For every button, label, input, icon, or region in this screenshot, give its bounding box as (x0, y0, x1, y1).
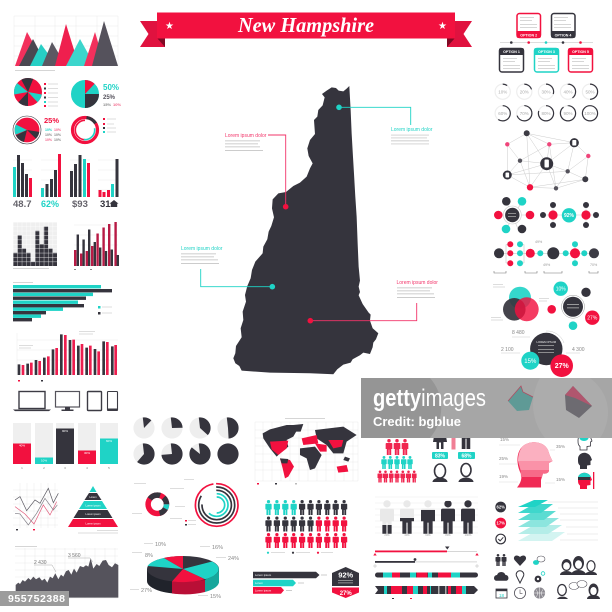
getty watermark band (361, 378, 612, 438)
arrow labels: Lorem (255, 581, 264, 585)
pyramid chart (68, 486, 118, 534)
pie 37 (189, 417, 211, 439)
callout: southeast red: Lorem ipsum dolor (396, 280, 438, 286)
area chart: 3 560 (68, 553, 81, 559)
3D pie chart (130, 542, 239, 600)
3D pie chart: 10% (155, 542, 166, 548)
layered stack chart (518, 500, 598, 541)
pie chart 1 (21, 85, 35, 99)
head segmented chart (499, 437, 565, 488)
people avatars (557, 556, 600, 599)
pie 62 (133, 443, 155, 465)
grouped bar chart (17, 331, 118, 382)
hexagon stat: 27% (340, 591, 352, 597)
stacked progress columns: 3 (64, 466, 66, 470)
progress rings: 20% (520, 89, 529, 94)
bubble flow row (494, 240, 599, 273)
pie stats 3: 25% (44, 116, 59, 125)
donut segments (132, 483, 185, 519)
icon set: 18 (499, 593, 504, 598)
option boxes (499, 14, 593, 72)
large bubble stats (501, 330, 585, 377)
people grid (265, 500, 347, 554)
3D pie chart: 27% (141, 588, 152, 594)
3D pie chart: 15% (210, 594, 221, 600)
line chart (13, 483, 58, 530)
bar chart group 48.7: 48.7 (13, 199, 32, 210)
rings legend (184, 479, 196, 526)
pyramid chart: Lorem ipsum (86, 512, 100, 516)
world map (255, 418, 358, 484)
bubble group: 27% (587, 316, 598, 322)
head segmented chart: 15% (500, 437, 509, 442)
progress rings: 90% (563, 111, 573, 116)
gender comparison: 68% (461, 454, 472, 460)
pie legend 1 (44, 83, 58, 107)
pie stats 2 (103, 83, 121, 107)
bar chart group $93 (70, 155, 90, 210)
callout: west red (225, 133, 289, 210)
person bar chart (375, 497, 478, 537)
large bubble stats: 4 300 (572, 347, 585, 353)
slider bars (373, 546, 479, 567)
quarter pies (133, 417, 155, 439)
pie chart 3 (13, 116, 41, 144)
3D pie chart: 24% (228, 556, 239, 562)
horizontal bar chart (13, 282, 112, 321)
callout: southwest teal: Lorem ipsum dolor (181, 246, 223, 252)
watermark id strip (0, 591, 69, 606)
progress rings: 80% (541, 111, 551, 116)
segmented pill bar (375, 572, 478, 578)
head segmented chart: 35% (556, 444, 565, 449)
pie 25 (161, 417, 183, 439)
bubble cluster 2 (540, 202, 599, 228)
stacked progress columns: 30% (84, 451, 90, 455)
option boxes: OPTION 1 (503, 50, 520, 54)
getty watermark band: Credit: bgblue (373, 415, 461, 429)
option boxes: OPTION 3 (538, 50, 555, 54)
pie 50 (217, 417, 239, 439)
arrow labels (253, 572, 327, 594)
person bar chart: 40% (404, 533, 410, 537)
pyramid chart: Lorem ipsum (86, 522, 100, 526)
head segmented chart: 25% (499, 456, 508, 461)
paired bar chart (74, 222, 119, 270)
hexagon stat (332, 567, 359, 598)
icon set (494, 554, 545, 599)
donut chart (72, 118, 98, 142)
pie stats 3: 10% (45, 128, 53, 132)
stacked progress columns: 4 (86, 466, 88, 470)
hexagon stat: 92% (338, 570, 354, 580)
pyramid chart: Lorem ipsum (86, 504, 100, 508)
title banner: New Hampshire (237, 13, 374, 37)
callout: north teal: Lorem ipsum dolor (391, 127, 433, 133)
person bar chart: 80% (445, 533, 451, 537)
pie stats 3: 10% (45, 138, 53, 142)
stacked progress columns (13, 423, 118, 470)
progress rings: 60% (498, 111, 507, 116)
stacked progress columns: 1 (21, 466, 23, 470)
large bubble stats: 15% (524, 359, 537, 365)
large bubble stats: 2 100 (501, 347, 514, 353)
callout: southwest teal (181, 246, 275, 290)
progress rings (495, 84, 598, 121)
venn diagram (491, 284, 549, 321)
stacked progress columns: 2 (43, 466, 45, 470)
concentric rings (195, 484, 238, 526)
stacked progress columns: 40% (19, 444, 25, 448)
area chart: 2 430 (34, 560, 47, 566)
pie stats 3: 10% (54, 133, 62, 137)
progress rings: 30% (541, 89, 551, 94)
pie stats 2: 10% (113, 102, 121, 107)
head segmented chart: 15% (556, 477, 565, 482)
gender comparison: 83% (435, 454, 446, 460)
pie stats 2: 15% (103, 102, 111, 107)
pie stats 3 (44, 116, 62, 142)
title banner: ★ (438, 21, 447, 32)
pie 100 (217, 443, 239, 465)
callout: north teal (336, 104, 433, 144)
network diagram (503, 130, 590, 190)
pie stats 3: 10% (45, 133, 53, 137)
stacked progress columns: 90% (62, 429, 68, 433)
progress rings: 40% (563, 89, 573, 94)
person bar chart: 60% (425, 533, 431, 537)
pie stats 2: 50% (103, 83, 119, 92)
small head icons (578, 434, 594, 489)
pyramid chart: Lorem (89, 495, 97, 499)
option boxes: OPTION 4 (555, 33, 571, 37)
title banner (140, 12, 472, 47)
large bubble stats: 27% (555, 363, 569, 370)
progress rings: 10% (498, 89, 507, 94)
arrow labels: Lorem ipsum (255, 573, 272, 577)
bar chart group 62%: 62% (41, 199, 59, 209)
3D pie chart: 8% (145, 553, 153, 559)
bubble flow row: 49% (543, 263, 551, 267)
progress rings: 100% (584, 111, 596, 116)
person bar chart: 20% (384, 533, 390, 537)
pie stats 3: 10% (54, 128, 62, 132)
option boxes: OPTION 5 (572, 50, 589, 54)
people pyramid (378, 424, 417, 482)
pie 75 (161, 443, 183, 465)
badge column: 62% (497, 505, 505, 510)
arrow stripe bar (375, 586, 478, 599)
bar chart group 48.7 (13, 155, 32, 210)
stacked progress columns: 5 (108, 466, 110, 470)
mountain chart (14, 16, 118, 71)
donut legend (103, 118, 116, 133)
block chart (13, 222, 57, 269)
callout: southeast red (308, 280, 438, 324)
bar chart group $93: $93 (72, 199, 88, 210)
option boxes: OPTION 2 (520, 33, 537, 37)
device icons (13, 392, 118, 411)
area chart (15, 546, 118, 598)
stacked progress columns: 10% (41, 458, 47, 462)
large bubble stats: 8 480 (512, 330, 525, 336)
head segmented chart: 19% (499, 474, 508, 479)
pie chart 2 (78, 87, 92, 101)
progress rings: 50% (585, 89, 595, 94)
bubble cluster 2: 92% (564, 213, 575, 219)
gender comparison (432, 418, 475, 482)
arrow labels: Lorem ipsum (255, 588, 272, 592)
pie stats 3: 10% (54, 138, 62, 142)
watermark id strip: 955752388 (8, 593, 65, 605)
3D pie chart: 16% (212, 545, 223, 551)
stacked progress columns: 60% (106, 439, 112, 443)
bar chart group 31 (98, 159, 118, 210)
large bubble stats: LOREM IPSUM (537, 340, 557, 344)
badge column: 17% (497, 521, 505, 526)
bar chart group 62% (41, 154, 61, 209)
bubble group (547, 282, 600, 330)
title banner: ★ (165, 21, 174, 32)
badge column (495, 502, 506, 544)
person bar chart: 100% (465, 533, 472, 537)
bubble group: 10% (556, 286, 566, 292)
pie 87 (189, 443, 211, 465)
callout: west red: Lorem ipsum dolor (225, 133, 267, 139)
bubble flow row: 49% (535, 240, 543, 244)
bar chart group 31: 31 (100, 199, 111, 210)
bubble flow row: 70% (590, 263, 598, 267)
progress rings: 70% (520, 111, 529, 116)
bubble cluster 1 (494, 197, 534, 233)
getty watermark band: gettyimages (373, 385, 486, 412)
map: New Hampshire (233, 86, 378, 374)
pie stats 2: 25% (103, 95, 116, 101)
